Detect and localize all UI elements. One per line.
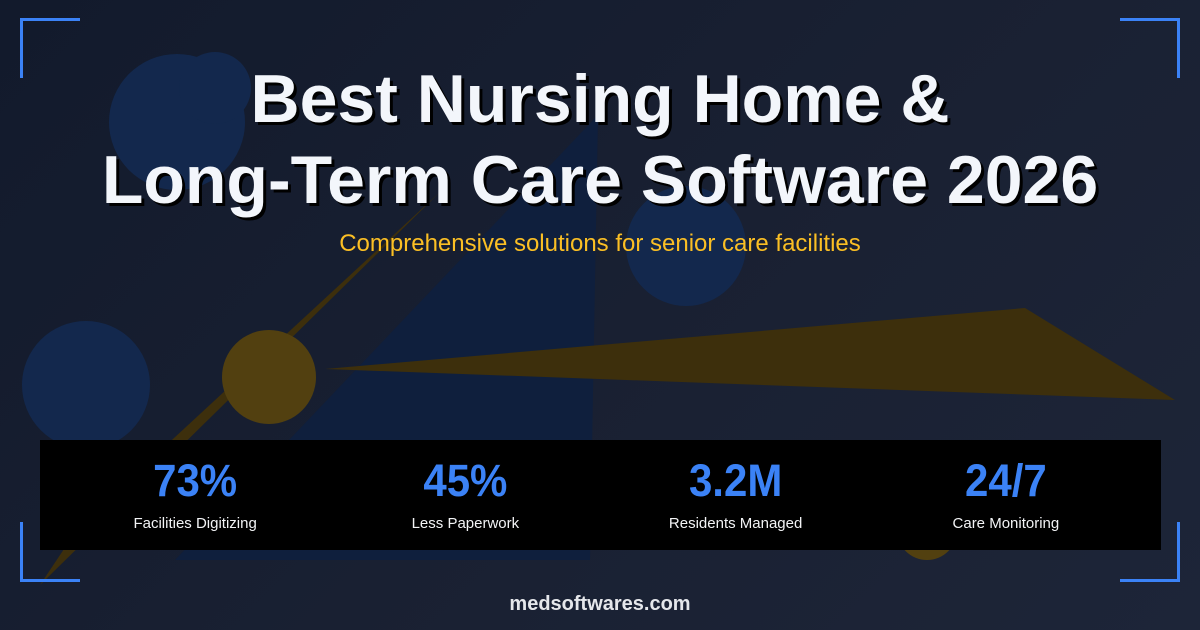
stat: residents: 3.2M: [689, 455, 782, 506]
stats bar: [40, 440, 1161, 550]
stat: residents: [669, 455, 802, 532]
subtitle: Comprehensive solutions for senior care facilities: [339, 230, 861, 257]
stat: residents: Residents Managed: [669, 515, 802, 532]
title: Best Nursing Home &: [250, 61, 950, 137]
stat: facilities: [133, 455, 257, 532]
stat: monitoring: Care Monitoring: [953, 515, 1059, 532]
stat: paperwork: Less Paperwork: [412, 515, 519, 532]
stat: facilities: 73%: [153, 455, 237, 506]
stat: monitoring: [953, 455, 1059, 532]
stat: monitoring: 24/7: [965, 455, 1047, 506]
stat: facilities: Facilities Digitizing: [133, 515, 257, 532]
footer url: medsoftwares.com: [509, 593, 691, 615]
stat: paperwork: [412, 455, 520, 532]
title: Long-Term Care Software 2026: [102, 142, 1098, 218]
stat: paperwork: 45%: [423, 455, 507, 506]
title: [102, 61, 1099, 220]
